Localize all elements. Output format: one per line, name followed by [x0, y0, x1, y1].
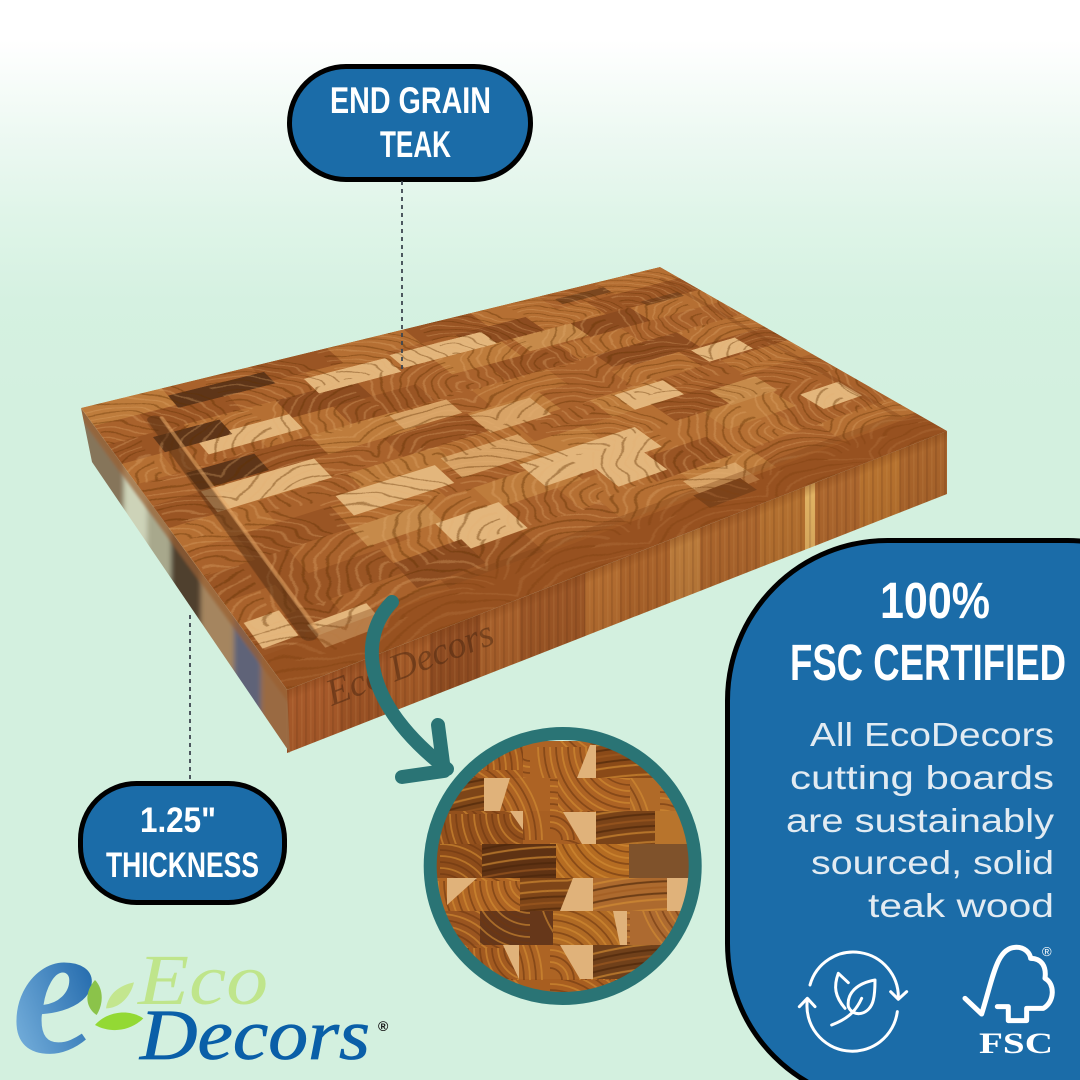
panel body text: sourced, solid [811, 844, 1054, 881]
panel body text: All EcoDecors [810, 716, 1054, 753]
pill text: 1.25" [140, 801, 216, 840]
arrow to detail circle [364, 595, 454, 784]
icon: recycling leaf [799, 952, 907, 1051]
pill text [106, 801, 259, 885]
base end-grain blocks [81, 267, 947, 690]
panel: FSC certified [725, 538, 1080, 1080]
pill text: END GRAIN [330, 80, 491, 121]
front margin shading [262, 413, 947, 690]
callout: end grain teak [287, 64, 533, 182]
FSC wordmark [979, 944, 1053, 1060]
panel body text: are sustainably [786, 802, 1055, 839]
FSC wordmark: ® [1042, 944, 1052, 959]
leader line: thickness [189, 615, 191, 779]
logo word Decors: Decors [139, 995, 370, 1075]
engraved logo on board: Eco Decors [319, 612, 500, 715]
pill shape [80, 784, 284, 902]
board side faces [81, 408, 947, 753]
pill text: TEAK [380, 124, 451, 165]
logo word Eco: Eco [137, 940, 268, 1020]
pill text: THICKNESS [106, 846, 259, 885]
panel heading: 100% [880, 572, 990, 629]
dark blocks [127, 276, 913, 655]
logo: EcoDecors [12, 884, 389, 1080]
board top face [81, 267, 947, 690]
registered mark: ® [378, 1018, 389, 1034]
light blocks [101, 284, 912, 667]
leader line: end grain [401, 181, 403, 369]
pill text [330, 80, 491, 165]
callout: thickness [78, 706, 432, 905]
cutting board [81, 267, 947, 753]
juice groove [133, 279, 898, 635]
icon: FSC tree [965, 947, 1052, 1021]
panel body text: cutting boards [790, 759, 1054, 796]
panel heading [790, 572, 1066, 691]
end grain detail circle [424, 727, 702, 1005]
panel body text: teak wood [868, 887, 1054, 924]
pill shape [290, 66, 530, 180]
FSC wordmark: FSC [979, 1027, 1053, 1060]
panel shape [728, 540, 1080, 1080]
logo leaves [87, 980, 143, 1030]
teal ring [430, 734, 695, 998]
light wood wedges [447, 745, 690, 979]
panel body text [786, 716, 1055, 924]
grain rings [81, 267, 947, 690]
wood blocks [436, 741, 689, 992]
